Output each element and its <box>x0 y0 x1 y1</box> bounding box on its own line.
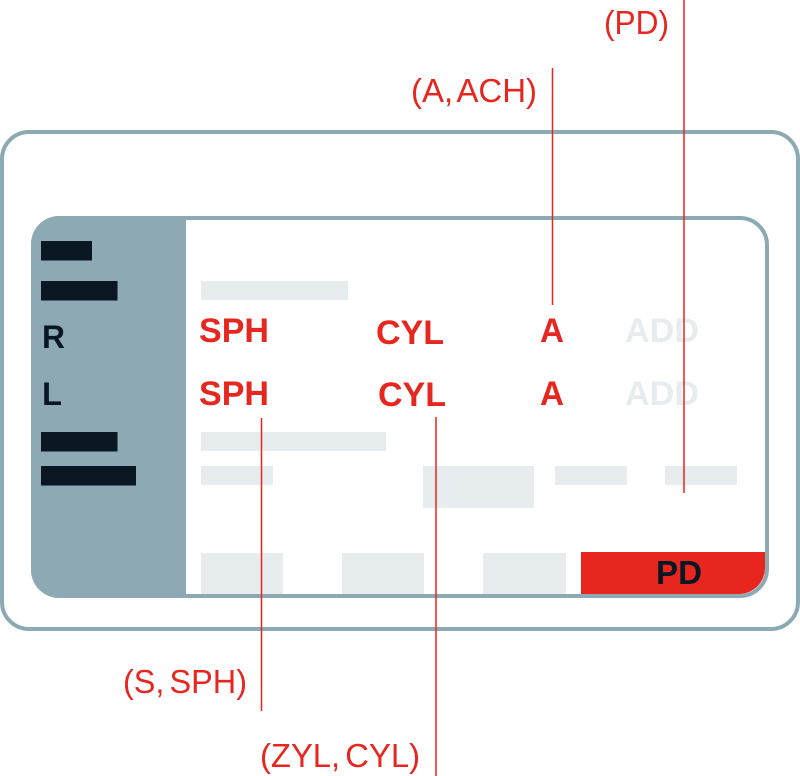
left eye values: CYL <box>378 376 446 414</box>
right eye values: CYL <box>376 314 444 352</box>
left eye values: A <box>540 375 564 413</box>
right eye values: ADD <box>625 312 699 350</box>
right eye values <box>199 312 699 352</box>
eye labels: R <box>42 319 65 355</box>
PD field: PD <box>656 554 702 591</box>
callout lines <box>262 0 684 776</box>
grey placeholder fields <box>201 281 737 594</box>
outer card <box>2 132 798 629</box>
eye labels: L <box>42 376 62 412</box>
sidebar <box>31 216 186 598</box>
callout labels: (ZYL, CYL) <box>260 737 420 774</box>
PD field <box>581 552 765 594</box>
left eye values: SPH <box>199 375 269 413</box>
callout labels: (S, SPH) <box>123 663 247 700</box>
left eye values: ADD <box>625 375 699 413</box>
left eye values <box>199 375 699 414</box>
right eye values: SPH <box>199 312 269 350</box>
sidebar redacted bars <box>41 241 136 486</box>
callout labels: (A, ACH) <box>411 72 537 109</box>
callout labels <box>123 4 669 774</box>
right eye values: A <box>540 312 564 350</box>
eye labels <box>42 319 65 412</box>
callout labels: (PD) <box>604 4 669 41</box>
inner prescription panel <box>31 216 767 598</box>
